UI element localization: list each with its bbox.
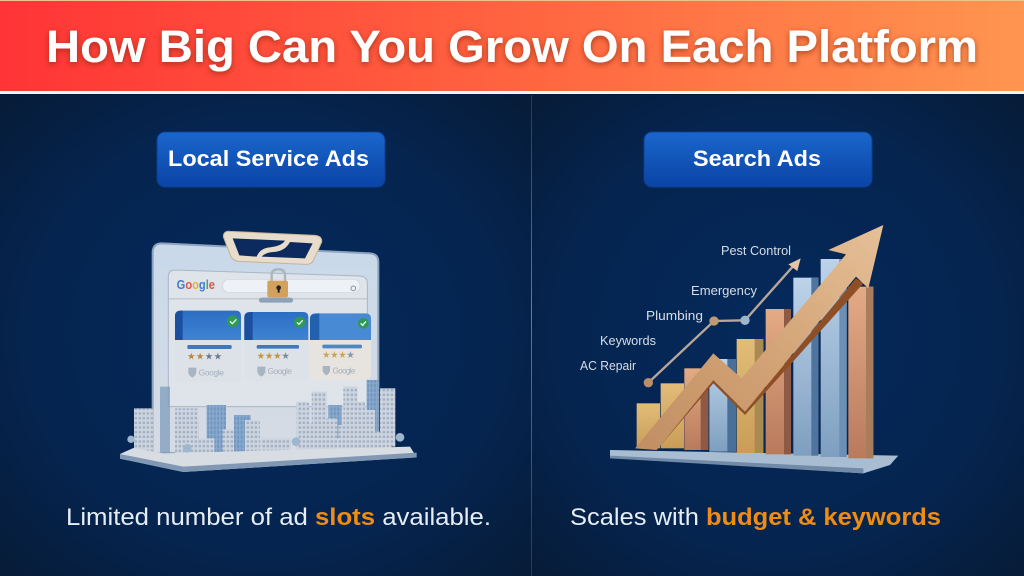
keyword labels: Emergency <box>691 284 758 298</box>
ad card 3 <box>310 313 371 380</box>
header banner <box>0 0 1024 94</box>
keyword trend line <box>644 258 801 387</box>
board <box>153 243 378 453</box>
ad card 3: ★★★★ <box>322 350 355 360</box>
panel: left background <box>0 95 531 576</box>
search bar <box>223 279 360 293</box>
bars <box>637 259 873 458</box>
growth arrow <box>635 225 883 450</box>
keyword labels: Pest Control <box>721 244 791 258</box>
keyword labels <box>580 244 791 373</box>
google logo: Google <box>177 278 215 292</box>
browser window <box>168 270 367 407</box>
ad card 1 <box>175 311 241 382</box>
button: Search Ads: Search Ads <box>693 146 821 171</box>
ad card 2: ★★★★ <box>257 351 290 362</box>
handle <box>223 231 322 264</box>
caption: limited slots: Limited number of ad slots available. <box>66 504 491 531</box>
city skyline <box>127 380 404 457</box>
ad card 2: Google <box>268 366 292 376</box>
button: Local Service Ads: Local Service Ads <box>168 146 369 171</box>
illustration: locked Google ad slots above a city <box>120 231 417 472</box>
ad card 2 <box>244 312 308 381</box>
illustration: growth bar chart with arrow <box>610 225 898 473</box>
keyword labels: AC Repair <box>580 359 636 373</box>
button: Local Service Ads <box>157 132 385 187</box>
padlock <box>259 269 293 303</box>
keyword labels: Plumbing <box>646 309 703 323</box>
panel: right background <box>532 95 1024 576</box>
caption: scales with budget and keywords: Scales with budget & keywords <box>570 504 941 531</box>
ad card 1: Google <box>199 367 224 377</box>
title: How Big Can You Grow On Each Platform <box>46 21 978 72</box>
base platform <box>120 447 417 472</box>
button: Search Ads <box>644 132 872 187</box>
ad card 1: ★★★★ <box>187 351 223 362</box>
ad card 3: Google <box>333 366 356 375</box>
keyword labels: Keywords <box>600 334 656 348</box>
chart base <box>610 450 898 473</box>
